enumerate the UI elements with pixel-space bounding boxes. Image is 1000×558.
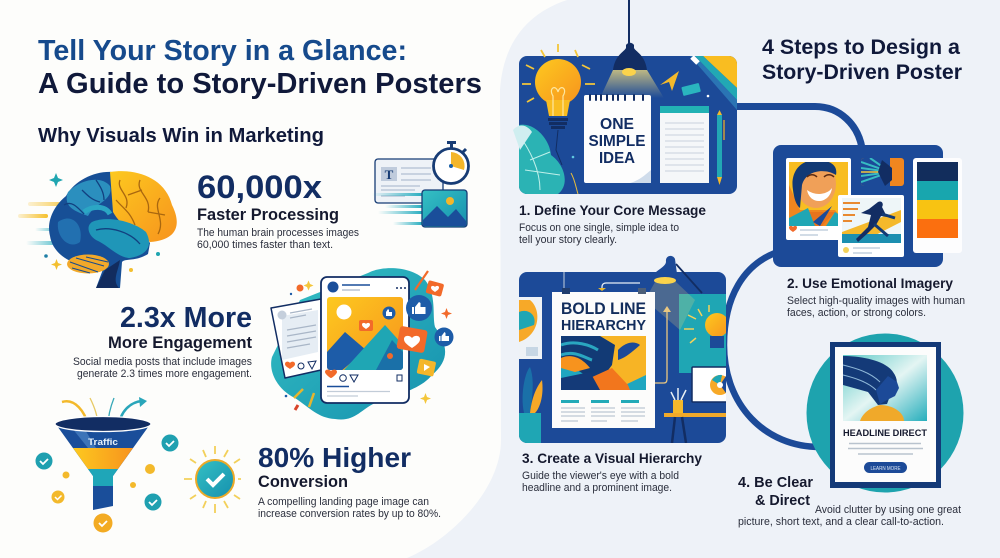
caption: step 4 — [738, 474, 961, 528]
stat: 80% higher conversion: 80% Higher — [258, 442, 411, 473]
title: Tell Your Story in a Glance: — [38, 35, 407, 67]
icon: traffic funnel: Traffic — [88, 437, 118, 448]
stat: 80% higher conversion: Conversion — [258, 472, 348, 491]
stat: 2.3x more engagement: More Engagement — [108, 333, 252, 352]
right heading: 4 steps — [762, 35, 963, 84]
caption: step 2 — [787, 275, 965, 319]
panel: step 1 illustration: ONE — [600, 116, 634, 133]
colour palette card — [913, 158, 962, 253]
panel: step 3 illustration: HIERARCHY — [561, 318, 646, 334]
icon: traffic funnel — [36, 397, 178, 532]
caption: step 2: Select high-quality images with human — [787, 295, 965, 307]
connector: step 2 through step 3 to step 4 — [724, 253, 820, 447]
panel: step 3 illustration: BOLD LINE — [561, 300, 646, 318]
caption: step 1: Focus on one single, simple idea to — [519, 222, 679, 234]
stat: 2.3x more engagement — [73, 302, 252, 380]
caption: step 3: headline and a prominent image. — [522, 482, 672, 494]
stat: 60,000x: 60,000x — [197, 169, 322, 205]
panel: step 1 illustration: IDEA — [599, 150, 635, 167]
caption: step 3: 3. Create a Visual Hierarchy — [522, 450, 702, 466]
stat: 60,000x: The human brain processes images — [197, 227, 359, 239]
title: A Guide to Story-Driven Posters — [38, 68, 482, 100]
connector: step 1 to step 2 — [735, 106, 862, 148]
icon: text page, stopwatch and image: T — [385, 167, 394, 182]
small motion image — [861, 158, 904, 186]
right heading: 4 steps: Story-Driven Poster — [762, 60, 963, 84]
caption: step 1: 1. Define Your Core Message — [519, 202, 706, 218]
icon: check badge with rays — [184, 446, 241, 513]
photo card: runner — [838, 195, 904, 257]
icon: text page, stopwatch and image — [372, 141, 468, 227]
section heading: why visuals win: Why Visuals Win in Marketing — [38, 124, 324, 147]
caption: step 4: picture, short text, and a clear call-to-action. — [738, 516, 944, 528]
title — [38, 35, 482, 100]
stat: 60,000x: 60,000 times faster than text. — [197, 239, 333, 251]
icon: brain — [18, 171, 177, 288]
right heading: 4 steps: 4 Steps to Design a — [762, 35, 961, 59]
caption: step 3 — [522, 450, 702, 494]
panel: step 1 illustration — [513, 0, 737, 194]
caption: step 2: faces, action, or strong colors. — [787, 307, 926, 319]
caption: step 3: Guide the viewer's eye with a bold — [522, 470, 679, 482]
stat: 2.3x more engagement: 2.3x More — [120, 302, 252, 334]
photo card: smiling face — [786, 158, 851, 240]
caption: step 4: Avoid clutter by using one great — [815, 504, 961, 516]
caption: step 4: 4. Be Clear — [738, 474, 813, 491]
stat: 2.3x more engagement: generate 2.3 times more engagement. — [77, 368, 252, 380]
panel: step 4 illustration: LEARN MORE — [870, 466, 901, 472]
caption: step 2: 2. Use Emotional Imagery — [787, 275, 953, 291]
panel: left white section — [0, 0, 567, 558]
stat: 2.3x more engagement: Social media posts that include images — [73, 356, 252, 368]
panel: step 4 illustration: HEADLINE DIRECT — [843, 428, 927, 439]
stat: 60,000x — [197, 169, 359, 251]
caption: step 1 — [519, 202, 706, 246]
panel: step 2 illustration — [773, 145, 962, 267]
caption: step 1: tell your story clearly. — [519, 234, 617, 246]
stat: 80% higher conversion: A compelling landing page image can — [258, 496, 429, 508]
stat: 60,000x: Faster Processing — [197, 205, 339, 224]
stat: 80% higher conversion — [258, 442, 441, 520]
icon: social media post — [271, 268, 454, 419]
panel: step 4 illustration — [806, 334, 964, 492]
caption: step 4: & Direct — [755, 492, 810, 509]
stat: 80% higher conversion: increase conversion rates by up to 80%. — [258, 508, 441, 520]
panel: step 1 illustration: SIMPLE — [588, 133, 646, 150]
panel: step 3 illustration — [519, 256, 732, 443]
